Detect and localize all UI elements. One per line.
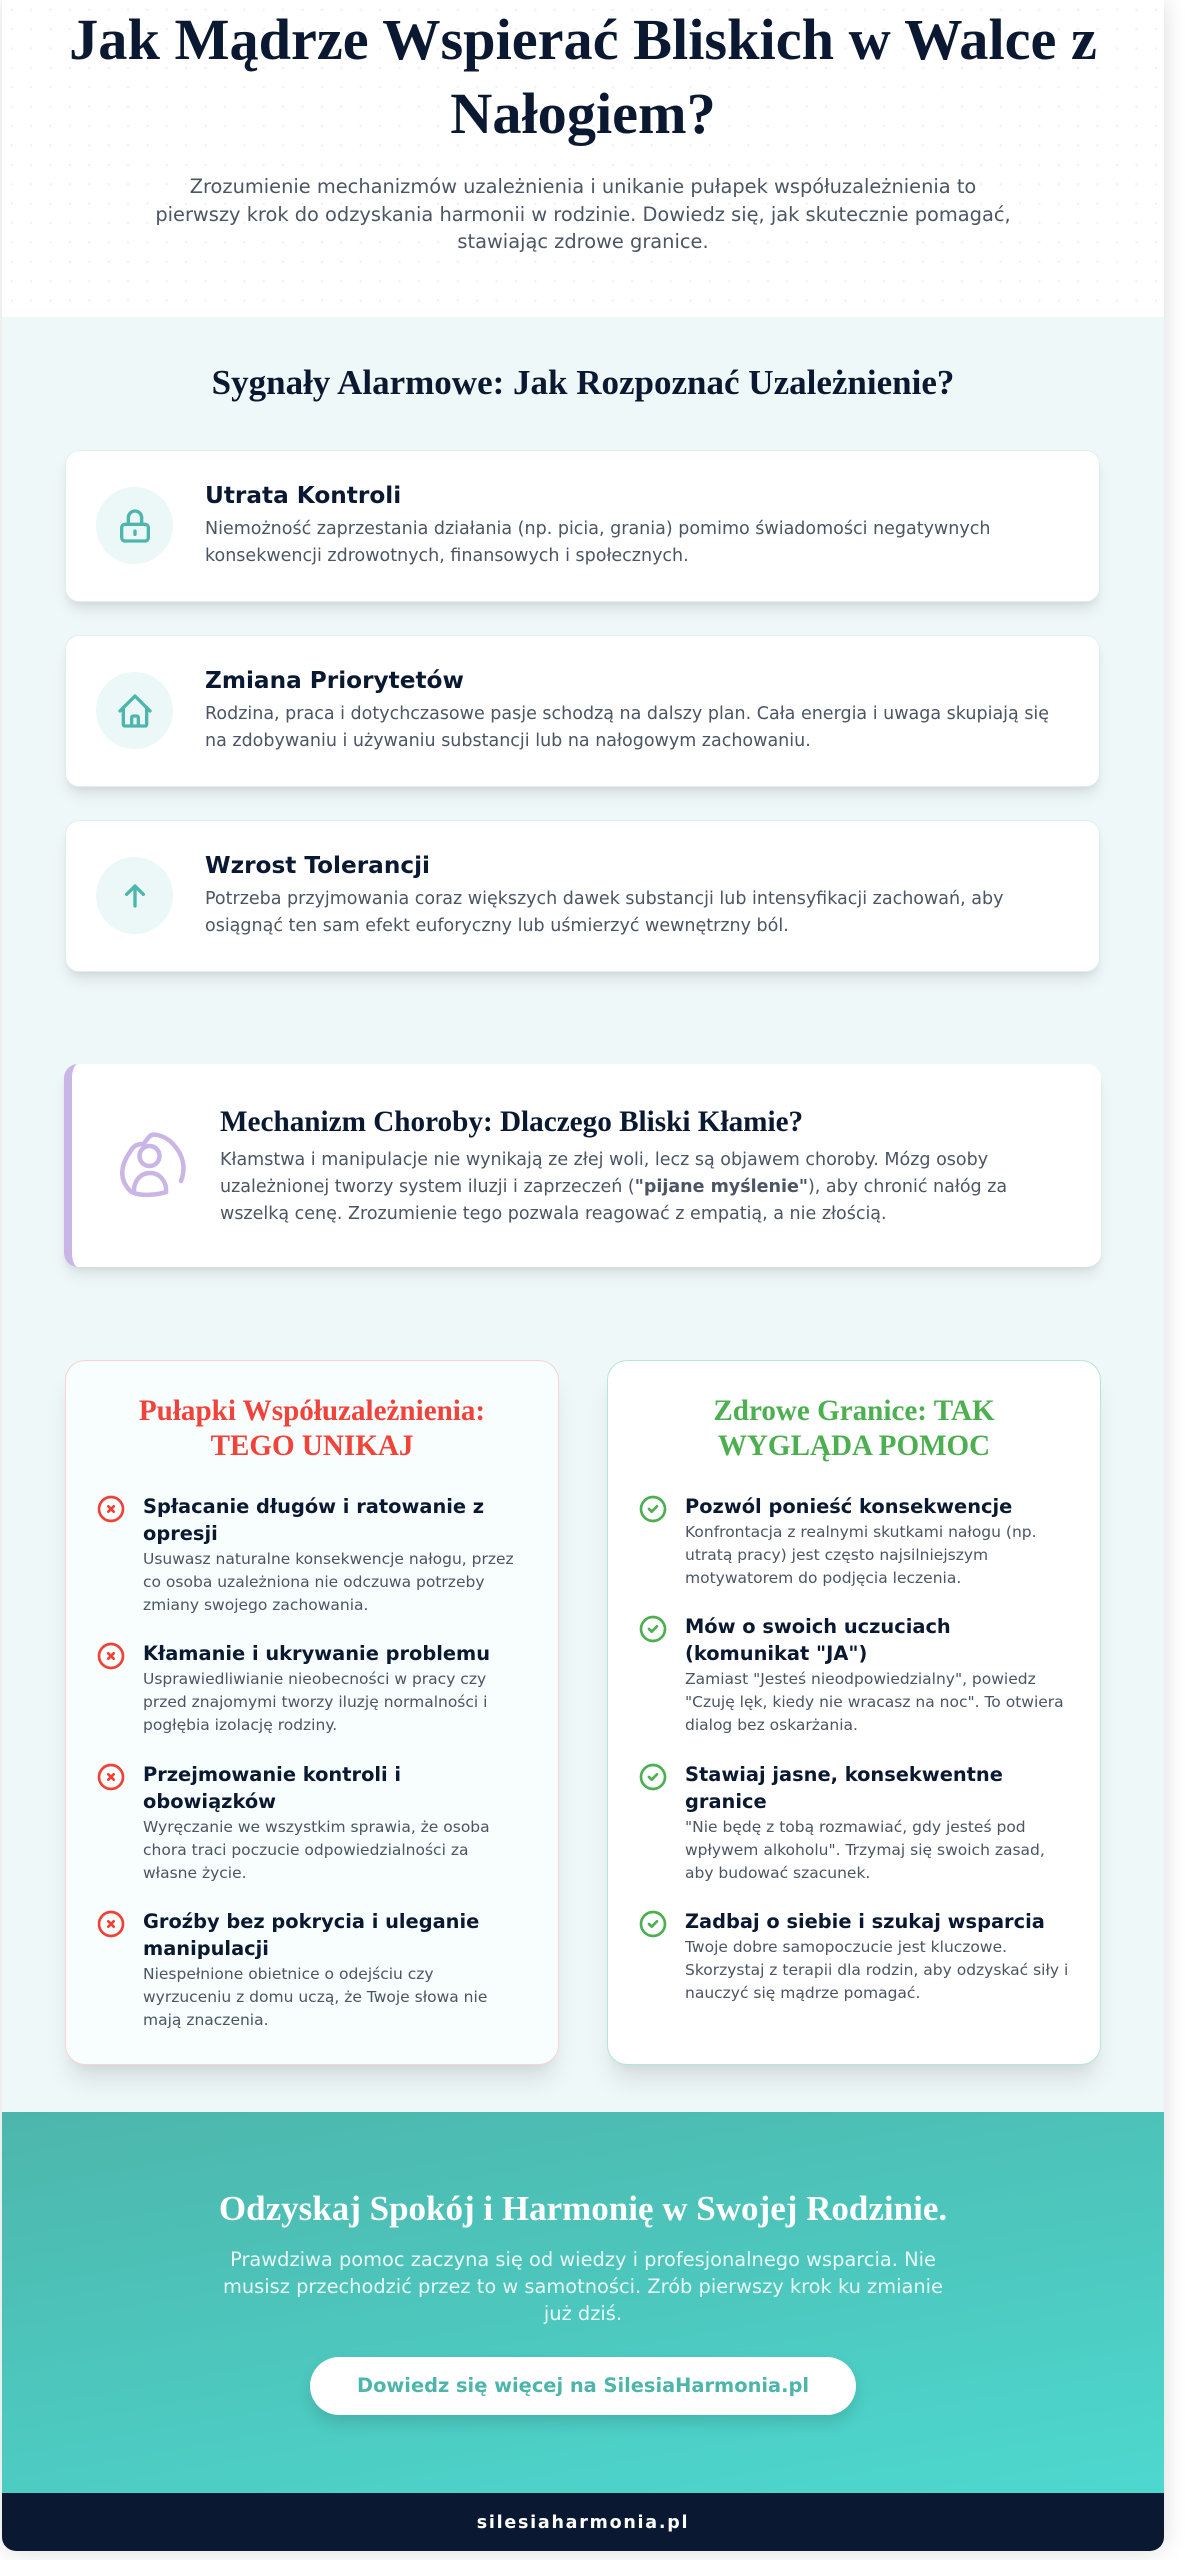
trap item 3: obowiązków (143, 1790, 276, 1813)
title (69, 7, 1097, 146)
trap item 4: Niespełnione obietnice o odejściu czy (143, 1964, 434, 1982)
trap item 1 (98, 1495, 514, 1614)
footer: silesiaharmonia.pl (477, 2513, 689, 2533)
trap item 3: własne życie. (143, 1864, 247, 1882)
CTA text: musisz przechodzić przez to w samotności. Zrób pierwszy krok ku zmianie (223, 2275, 943, 2298)
boundary item 1: utratą pracy) jest często najsilniejszym (685, 1546, 988, 1564)
trap item 2: Usprawiedliwianie nieobecności w pracy czy (143, 1670, 486, 1688)
panel: mechanism of illness (64, 1064, 1101, 1267)
card text: loss of control: Niemożność zaprzestania działania (np. picia, grania) pomimo świadomości negatywnych (205, 519, 990, 539)
boundary item 2: (komunikat "JA") (685, 1642, 867, 1665)
trap item 4 (98, 1910, 487, 2029)
boundary item 4: Skorzystaj z terapii dla rodzin, aby odzyskać siły i (685, 1961, 1068, 1979)
trap item 4: Groźby bez pokrycia i uleganie (143, 1910, 479, 1933)
boundary item 2: Zamiast "Jesteś nieodpowiedzialny", powiedz (685, 1670, 1036, 1688)
trap item 3: Wyręczanie we wszystkim sprawia, że osoba (143, 1818, 490, 1836)
trap item 1: opresji (143, 1522, 218, 1545)
card: rising tolerance (65, 820, 1100, 972)
title: Jak Mądrze Wspierać Bliskich w Walce z (69, 7, 1097, 72)
CTA button: Dowiedz się więcej na SilesiaHarmonia.pl (357, 2374, 809, 2397)
boundary item 3 (640, 1763, 1045, 1882)
card title: rising tolerance: Wzrost Tolerancji (205, 852, 430, 879)
card text: rising tolerance: Potrzeba przyjmowania coraz większych dawek substancji lub intensyfikacji zachowań, aby (205, 889, 1003, 909)
boundary item 1: Pozwól ponieść konsekwencje (685, 1495, 1012, 1518)
card title: changed priorities: Zmiana Priorytetów (205, 667, 464, 694)
column heading: boundaries: WYGLĄDA POMOC (718, 1430, 990, 1462)
panel text: mechanism (220, 1150, 1007, 1224)
column heading: traps: TEGO UNIKAJ (211, 1430, 413, 1462)
boundary item 2 (640, 1615, 1064, 1734)
trap item 3: chora traci poczucie odpowiedzialności za (143, 1841, 468, 1859)
boundary item 3: granice (685, 1790, 767, 1813)
panel text: mechanism: Kłamstwa i manipulacje nie wynikają ze złej woli, lecz są objawem choroby. Mózg osoby (220, 1150, 988, 1170)
icon: lock (96, 487, 173, 564)
boundary item 4: Zadbaj o siebie i szukaj wsparcia (685, 1910, 1045, 1933)
icon: house (96, 672, 173, 749)
card: loss of control (65, 450, 1100, 602)
card text: rising tolerance: osiągnąć ten sam efekt euforyczny lub uśmierzyć wewnętrzny ból. (205, 916, 789, 936)
card text: changed priorities (205, 704, 1049, 751)
boundary item 2: Mów o swoich uczuciach (685, 1615, 951, 1638)
CTA text: Prawdziwa pomoc zaczyna się od wiedzy i profesjonalnego wsparcia. Nie (230, 2248, 936, 2270)
column heading: boundaries: Zdrowe Granice: TAK (713, 1395, 995, 1427)
trap item 4: mają znaczenia. (143, 2011, 269, 2029)
boundary item 3: "Nie będę z tobą rozmawiać, gdy jesteś pod (685, 1818, 1026, 1836)
column heading: boundaries (713, 1395, 995, 1462)
trap item 4: manipulacji (143, 1937, 269, 1960)
trap item 2: pogłębia izolację rodziny. (143, 1716, 337, 1734)
trap item 2: Kłamanie i ukrywanie problemu (143, 1642, 490, 1665)
panel: main section background (2, 317, 1164, 2112)
trap item 1: co osoba uzależniona nie odczuwa potrzeby (143, 1573, 484, 1591)
column heading: traps (139, 1395, 485, 1462)
heading: warning signs: Sygnały Alarmowe: Jak Rozpoznać Uzależnienie? (212, 363, 954, 402)
CTA text: już dziś. (544, 2302, 622, 2325)
boundary item 2: "Czuję lęk, kiedy nie wracasz na noc". To otwiera (685, 1693, 1064, 1711)
subtitle: pierwszy krok do odzyskania harmonii w rodzinie. Dowiedz się, jak skutecznie pomagać, (155, 202, 1011, 226)
card text: changed priorities: Rodzina, praca i dotychczasowe pasje schodzą na dalszy plan. Cała energia i uwaga skupiają się (205, 704, 1049, 724)
CTA heading: Odzyskaj Spokój i Harmonię w Swojej Rodzinie. (219, 2189, 947, 2228)
subtitle: stawiając zdrowe granice. (457, 230, 709, 253)
card text: loss of control (205, 519, 990, 566)
card text: rising tolerance (205, 889, 1003, 936)
panel: header (2, 0, 1164, 317)
boundary item 3: Stawiaj jasne, konsekwentne (685, 1763, 1003, 1786)
trap item 4: wyrzuceniu z domu uczą, że Twoje słowa nie (143, 1988, 487, 2006)
panel text: mechanism: wszelką cenę. Zrozumienie tego pozwala reagować z empatią, a nie złością. (220, 1204, 887, 1224)
footer (2, 2493, 1164, 2551)
boundary item 1: motywatorem do podjęcia leczenia. (685, 1569, 961, 1587)
boundary item 4: Twoje dobre samopoczucie jest kluczowe. (685, 1938, 1007, 1956)
panel title: mechanism: Mechanizm Choroby: Dlaczego Bliski Kłamie? (220, 1106, 803, 1138)
boundary item 3: wpływem alkoholu". Trzymaj się swoich zasad, (685, 1841, 1045, 1859)
trap item 1: Spłacanie długów i ratowanie z (143, 1495, 484, 1518)
boundary item 1 (640, 1495, 1037, 1587)
title: Nałogiem? (450, 80, 716, 146)
subtitle: Zrozumienie mechanizmów uzależnienia i unikanie pułapek współuzależnienia to (190, 175, 976, 198)
trap item 1: zmiany swojego zachowania. (143, 1596, 368, 1614)
column heading: traps: Pułapki Współuzależnienia: (139, 1395, 485, 1427)
subtitle (155, 175, 1011, 253)
panel: call to action (2, 2112, 1164, 2493)
boundary item 2: dialog bez oskarżania. (685, 1716, 858, 1734)
trap item 1: Usuwasz naturalne konsekwencje nałogu, przez (143, 1550, 514, 1568)
icon: person in broken circle (120, 1132, 186, 1198)
icon: arrow up (96, 857, 173, 934)
trap item 2: przed znajomymi tworzy iluzję normalności i (143, 1693, 487, 1711)
panel: codependency traps (65, 1360, 559, 2065)
card title: loss of control: Utrata Kontroli (205, 482, 401, 509)
trap item 3 (98, 1763, 490, 1882)
CTA button (310, 2357, 856, 2415)
card text: loss of control: konsekwencji zdrowotnych, finansowych i społecznych. (205, 546, 689, 566)
trap item 2 (98, 1642, 490, 1734)
boundary item 1: Konfrontacja z realnymi skutkami nałogu (np. (685, 1522, 1037, 1540)
trap item 3: Przejmowanie kontroli i (143, 1763, 401, 1786)
CTA text (223, 2248, 943, 2325)
card: changed priorities (65, 635, 1100, 787)
card text: changed priorities: na zdobywaniu i używaniu substancji lub na nałogowym zachowaniu. (205, 731, 811, 751)
boundary item 3: aby budować szacunek. (685, 1864, 870, 1882)
panel text: mechanism: uzależnionej tworzy system iluzji i zaprzeczeń ("pijane myślenie"), aby chronić nałóg za (220, 1177, 1007, 1197)
panel: healthy boundaries (607, 1360, 1101, 2065)
boundary item 4: nauczyć się mądrze pomagać. (685, 1984, 920, 2002)
boundary item 4 (640, 1910, 1068, 2002)
